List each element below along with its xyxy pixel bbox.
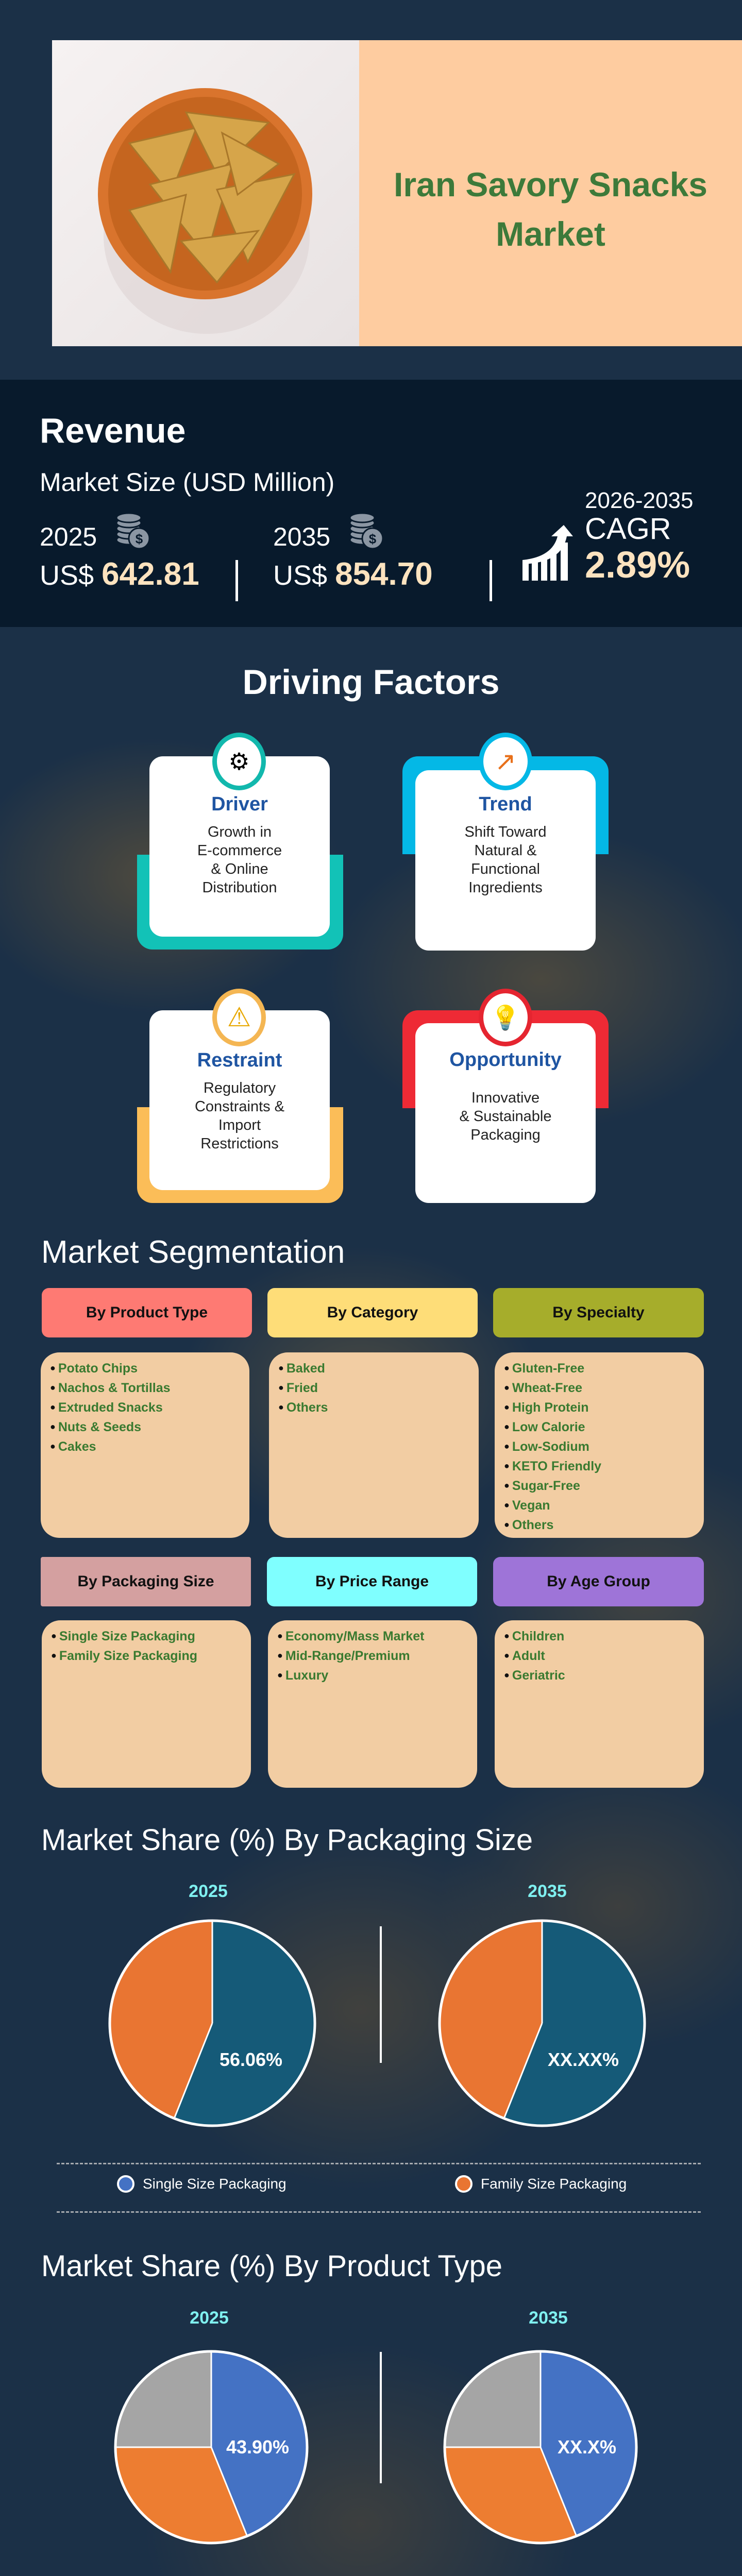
segment: category	[267, 1288, 478, 1337]
segmentation grid: Sugar-Free	[512, 1479, 580, 1493]
card: driver: Distribution	[202, 879, 277, 896]
icon: trend: ↗	[495, 747, 516, 776]
CAGR block	[585, 488, 693, 586]
icon: coins	[350, 514, 382, 548]
pie chart: product 2025: 43.90%	[226, 2436, 289, 2458]
segmentation grid: Single Size Packaging	[59, 1629, 195, 1643]
stat 2025: 2025	[40, 522, 97, 551]
revenue panel	[0, 380, 742, 627]
legend: packaging: Single Size Packaging	[143, 2176, 286, 2192]
segmentation grid: Low-Sodium	[512, 1439, 589, 1454]
driving factors heading: Driving Factors	[243, 663, 499, 702]
segment: packaging size	[41, 1557, 251, 1606]
pie chart: product 2035: XX.X%	[558, 2436, 616, 2458]
card: driver: & Online	[211, 861, 268, 877]
card: restraint: Restraint	[197, 1049, 282, 1071]
CAGR block: CAGR	[585, 512, 671, 546]
segmentation grid	[41, 1288, 704, 1788]
card: driver	[137, 733, 343, 950]
card: driver: E-commerce	[197, 842, 282, 859]
photo: bowl of snacks	[52, 40, 359, 346]
heading: product type share: Market Share (%) By Product Type	[41, 2249, 502, 2283]
divider	[235, 560, 238, 601]
pie chart: packaging 2035	[438, 1920, 646, 2127]
segmentation grid: Potato Chips	[58, 1361, 138, 1376]
icon: coins: $	[369, 531, 377, 547]
icon: coins	[117, 514, 148, 548]
title: Market	[496, 215, 605, 253]
card: restraint: Import	[218, 1117, 261, 1133]
card: trend	[402, 733, 609, 951]
segment: specialty	[493, 1288, 704, 1337]
heading: packaging share: Market Share (%) By Packaging Size	[41, 1823, 533, 1857]
icon: warning: ⚠	[227, 1003, 251, 1032]
segmentation grid: Others	[512, 1518, 553, 1532]
card: trend: Functional	[471, 861, 540, 877]
header panel	[52, 40, 742, 346]
stat 2035: US$ 854.70	[273, 556, 433, 592]
segmentation grid: Family Size Packaging	[59, 1649, 197, 1663]
pie chart: product 2035	[443, 2350, 638, 2544]
segmentation grid: Nachos & Tortillas	[58, 1381, 171, 1395]
segment: age group	[493, 1557, 704, 1606]
card: trend: Natural &	[475, 842, 536, 859]
card: driver: Driver	[211, 793, 268, 815]
year label 2035: 2035	[528, 1882, 567, 1901]
icon: coins: $	[136, 531, 143, 547]
icon: lightbulb	[479, 989, 532, 1046]
segmentation grid: Extruded Snacks	[58, 1400, 163, 1415]
year label 2025: 2025	[189, 1882, 228, 1901]
segmentation grid: Low Calorie	[512, 1420, 585, 1434]
card: trend: Shift Toward	[464, 824, 547, 840]
divider	[380, 2352, 382, 2483]
pie chart: product 2025	[114, 2350, 308, 2544]
card: driver: Growth in	[208, 824, 272, 840]
year label 2035: 2035	[529, 2308, 568, 2328]
segment: price range: By Price Range	[315, 1573, 429, 1590]
divider	[380, 1926, 382, 2063]
segmentation grid: High Protein	[512, 1400, 588, 1415]
card: restraint: Regulatory	[204, 1080, 276, 1096]
card: opportunity: Packaging	[470, 1127, 541, 1143]
segmentation grid: Children	[512, 1629, 564, 1643]
segmentation grid: Nuts & Seeds	[58, 1420, 141, 1434]
icon: lightbulb: 💡	[491, 1004, 520, 1031]
title	[394, 165, 707, 253]
card: restraint: Restrictions	[200, 1136, 279, 1152]
segmentation grid: Vegan	[512, 1498, 550, 1513]
segment: packaging size: By Packaging Size	[77, 1573, 214, 1590]
segmentation grid: Economy/Mass Market	[285, 1629, 424, 1643]
segmentation grid: Gluten-Free	[512, 1361, 584, 1376]
CAGR block: 2026-2035	[585, 488, 693, 513]
segment: category: By Category	[327, 1304, 418, 1321]
segmentation grid: Others	[286, 1400, 328, 1415]
segmentation grid: Cakes	[58, 1439, 96, 1454]
segment: age group: By Age Group	[547, 1573, 650, 1590]
segment: price range	[267, 1557, 477, 1606]
card: trend: Ingredients	[468, 879, 543, 896]
card: trend: Trend	[479, 793, 532, 815]
stat 2035: 2035	[273, 522, 330, 551]
legend: packaging	[117, 2175, 627, 2193]
stat 2035	[273, 514, 433, 592]
revenue heading: Revenue	[40, 411, 185, 450]
title: Iran Savory Snacks	[394, 165, 707, 204]
market segmentation heading: Market Segmentation	[41, 1234, 345, 1270]
market size label: Market Size (USD Million)	[40, 468, 334, 497]
stat 2025: US$ 642.81	[40, 556, 199, 592]
segmentation grid: Baked	[286, 1361, 325, 1376]
card: opportunity: & Sustainable	[460, 1108, 551, 1125]
divider	[490, 560, 492, 601]
CAGR block: 2.89%	[585, 545, 690, 586]
segment: product type	[42, 1288, 252, 1337]
card: restraint: Constraints &	[195, 1098, 284, 1115]
segmentation grid: Wheat-Free	[512, 1381, 582, 1395]
icon: warning	[212, 989, 266, 1046]
pie chart: packaging 2035: XX.XX%	[548, 2049, 619, 2070]
segment: product type: By Product Type	[86, 1304, 208, 1321]
segmentation grid: Geriatric	[512, 1668, 565, 1683]
icon: growth arrow	[522, 525, 573, 581]
segmentation grid: Fried	[286, 1381, 318, 1395]
icon: driver: ⚙	[228, 748, 250, 775]
legend: packaging: Family Size Packaging	[481, 2176, 627, 2192]
card: opportunity	[402, 989, 609, 1203]
year label 2025: 2025	[190, 2308, 229, 2328]
card: restraint	[137, 989, 343, 1203]
segmentation grid: Mid-Range/Premium	[285, 1649, 410, 1663]
pie chart: packaging 2025	[108, 1920, 316, 2127]
stat 2025	[40, 514, 199, 592]
segment: specialty: By Specialty	[552, 1304, 645, 1321]
card: opportunity: Opportunity	[449, 1049, 562, 1071]
card: opportunity: Innovative	[471, 1090, 539, 1106]
pie chart: packaging 2025: 56.06%	[220, 2049, 282, 2070]
icon: driver	[212, 733, 266, 790]
segmentation grid: Adult	[512, 1649, 545, 1663]
segmentation grid: Luxury	[285, 1668, 328, 1683]
segmentation grid: KETO Friendly	[512, 1459, 601, 1473]
icon: trend	[479, 733, 532, 790]
